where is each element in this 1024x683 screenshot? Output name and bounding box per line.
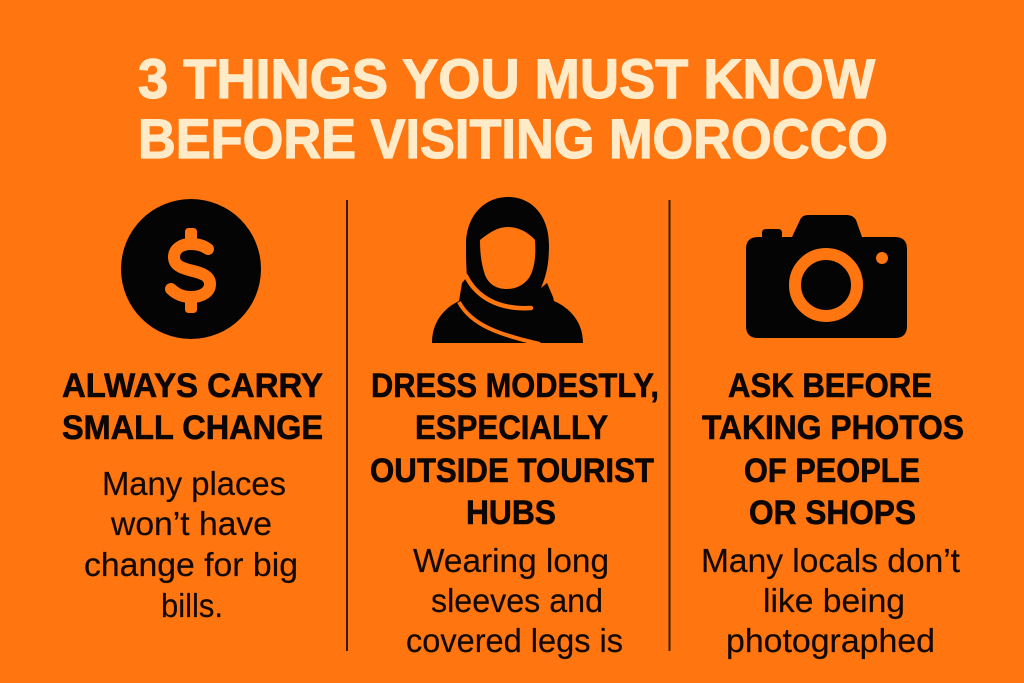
text: dress modestly description: covered legs is	[406, 622, 623, 659]
heading: always carry small change	[62, 367, 323, 447]
panel: small change	[62, 199, 323, 624]
text: dress modestly description	[406, 542, 623, 659]
heading: ask before taking photos: ASK BEFORE	[728, 367, 932, 405]
title	[138, 47, 888, 170]
text: small change description: won’t have	[110, 505, 272, 542]
text: ask before photos description: photographed	[726, 622, 935, 659]
heading: ask before taking photos: OR SHOPS	[749, 494, 916, 532]
heading: dress modestly: HUBS	[466, 494, 556, 532]
icon: camera	[746, 215, 907, 338]
heading: ask before taking photos	[702, 367, 964, 532]
heading: always carry small change: ALWAYS CARRY	[62, 367, 323, 405]
heading: ask before taking photos: OF PEOPLE	[744, 452, 920, 490]
text: small change description: change for big	[84, 546, 298, 583]
panel: ask before photos	[701, 215, 964, 659]
text: small change description	[84, 465, 298, 624]
text: dress modestly description: sleeves and	[431, 582, 603, 619]
title: BEFORE VISITING MOROCCO	[138, 107, 888, 170]
text: ask before photos description	[701, 542, 960, 659]
heading: dress modestly: OUTSIDE TOURIST	[370, 452, 654, 490]
heading: dress modestly: DRESS MODESTLY,	[371, 367, 659, 405]
text: dress modestly description: Wearing long	[413, 542, 609, 579]
heading: dress modestly	[370, 367, 659, 532]
heading: ask before taking photos: TAKING PHOTOS	[702, 409, 964, 447]
heading: dress modestly: ESPECIALLY	[415, 409, 608, 447]
panel: dress modestly	[370, 197, 659, 659]
heading: always carry small change: SMALL CHANGE	[62, 409, 323, 447]
title: 3 THINGS YOU MUST KNOW	[138, 47, 875, 110]
text: small change description: bills.	[161, 587, 223, 624]
text: ask before photos description: like being	[763, 582, 905, 619]
text: ask before photos description: Many locals don’t	[701, 542, 960, 579]
icon: woman in headscarf	[432, 197, 583, 344]
text: small change description: Many places	[102, 465, 286, 502]
icon: dollar coin	[121, 199, 261, 339]
